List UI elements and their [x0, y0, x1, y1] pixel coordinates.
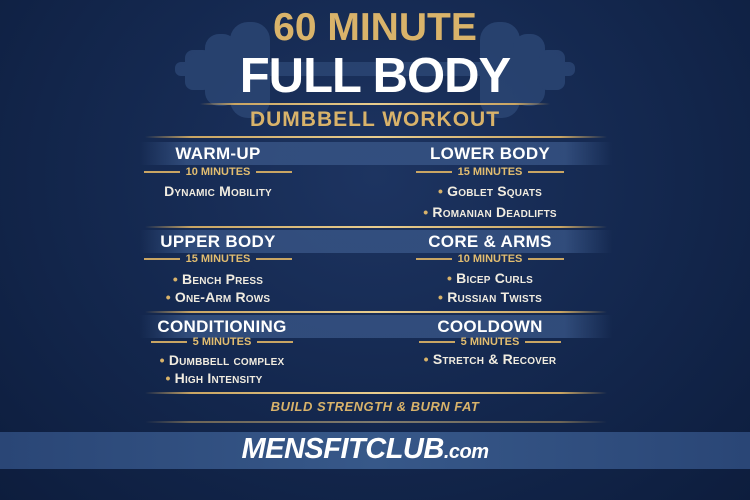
- panel: cooldown: • Stretch & Recover: [424, 351, 556, 367]
- panel: warm-up: Dynamic Mobility: [164, 183, 272, 199]
- panel: lower body: LOWER BODY: [430, 144, 550, 163]
- panel: lower body: • Goblet Squats: [438, 183, 542, 199]
- panel: cooldown: [419, 317, 561, 367]
- panel: cooldown: COOLDOWN: [437, 317, 543, 336]
- tagline: BUILD STRENGTH & BURN FAT: [271, 399, 479, 414]
- panel: upper body: [144, 232, 292, 305]
- panel: cooldown: 5 MINUTES: [461, 336, 519, 348]
- title: 60 MINUTE: 60 MINUTE: [273, 6, 477, 49]
- panel: warm-up: WARM-UP: [175, 144, 261, 163]
- panel: core & arms: • Bicep Curls: [447, 270, 533, 286]
- panel: upper body: UPPER BODY: [160, 232, 276, 251]
- icon: dumbbell background: [175, 22, 575, 118]
- panel: core & arms: 10 MINUTES: [458, 253, 522, 265]
- panel: lower body: • Romanian Deadlifts: [423, 204, 557, 220]
- footer bar: website: MENSFITCLUB.com: [241, 433, 488, 465]
- subtitle: DUMBBELL WORKOUT: [250, 108, 500, 131]
- panel: core & arms: CORE & ARMS: [428, 232, 552, 251]
- title: FULL BODY: FULL BODY: [240, 49, 510, 103]
- panel: upper body: • Bench Press: [173, 271, 263, 287]
- panel: upper body: • One-Arm Rows: [166, 289, 270, 305]
- panel: core & arms: • Russian Twists: [438, 289, 542, 305]
- panel: conditioning: • Dumbbell complex: [160, 352, 284, 368]
- panel: conditioning: 5 MINUTES: [193, 336, 251, 348]
- panel: lower body: 15 MINUTES: [458, 166, 522, 178]
- panel: warm-up: 10 MINUTES: [186, 166, 250, 178]
- panel: conditioning: • High Intensity: [165, 370, 263, 386]
- panel: conditioning: [151, 317, 293, 386]
- footer bar: website: [0, 432, 750, 469]
- panel: lower body: [416, 144, 564, 220]
- panel: conditioning: CONDITIONING: [157, 317, 287, 336]
- panel: core & arms: [416, 232, 564, 305]
- panel: upper body: 15 MINUTES: [186, 253, 250, 265]
- panel: warm-up: [144, 144, 292, 199]
